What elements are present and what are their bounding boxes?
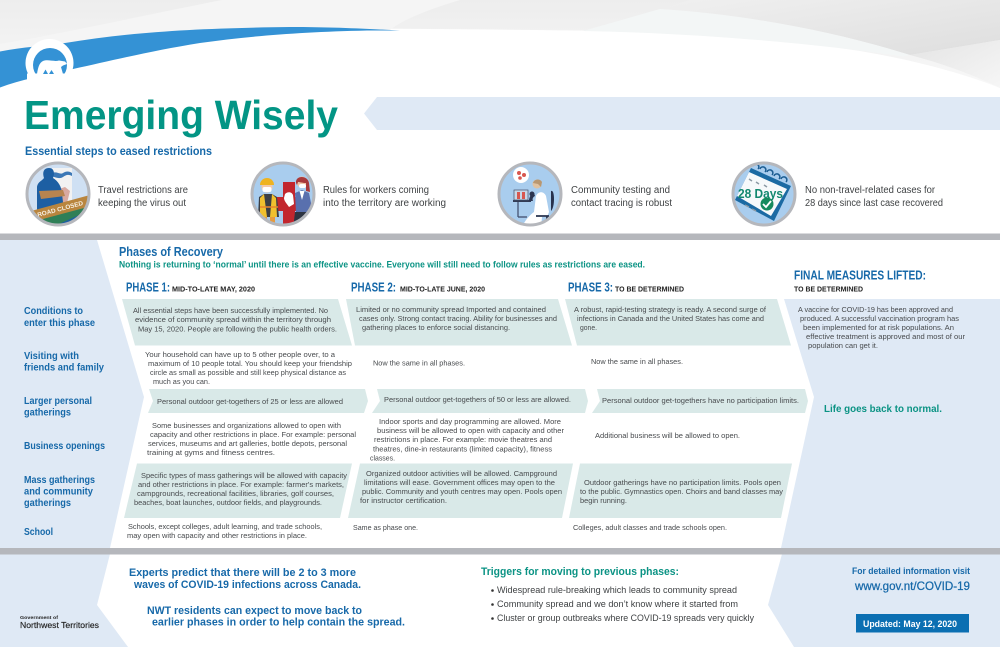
triggers list: Cluster or group outbreaks where COVID-19 spreads very quickly <box>497 613 755 623</box>
blue swoosh <box>0 27 400 88</box>
text: workers rules: into the territory are working <box>323 198 446 209</box>
teal row: larger gatherings <box>148 389 808 413</box>
phase 2 heading <box>351 280 485 294</box>
business phase 2 text: restrictions in place. For example: movie theatres and <box>374 435 552 444</box>
mass gatherings phase 2 text: for instructor certification. <box>360 496 447 505</box>
phase 2 heading: MID-TO-LATE JUNE, 2020 <box>400 284 485 294</box>
icon: 28 day calendar <box>734 164 794 224</box>
text: testing: contact tracing is robust <box>571 198 672 209</box>
final conditions text: population can get it. <box>808 341 878 350</box>
mass gatherings phase 2 text: limitations will ease. Government offices may open to the <box>364 478 555 487</box>
teal row: conditions <box>122 299 791 346</box>
final measures heading: TO BE DETERMINED <box>794 284 864 294</box>
header swoosh background <box>0 0 1000 88</box>
business phase 2 text: theatres, dine-in restaurants (limited capacity), fitness <box>373 444 552 454</box>
conditions phase 1 text: All essential steps have been successfully implemented. No <box>133 306 328 315</box>
experts prediction text: earlier phases in order to help contain the spread. <box>152 616 405 628</box>
row labels: gatherings <box>24 498 71 509</box>
subtitle: Essential steps to eased restrictions <box>25 145 212 158</box>
business phase 1 text: capacity and other restrictions in place. For example: personal <box>150 430 356 439</box>
experts prediction text <box>129 567 405 628</box>
phases heading: Phases of Recovery <box>119 244 224 259</box>
business phase 2 text: classes. <box>370 454 395 462</box>
icon: road closed: ROAD CLOSED <box>37 200 84 219</box>
phase 3 heading <box>568 280 685 294</box>
row labels: Conditions to <box>24 306 83 317</box>
web link block: www.gov.nt/COVID-19 <box>854 579 970 593</box>
visiting phase 2 text: Now the same in all phases. <box>373 358 465 368</box>
larger gatherings phase 1 text: Personal outdoor get-togethers of 25 or less are allowed <box>157 397 343 406</box>
row labels: enter this phase <box>24 318 95 329</box>
business phase 2 text: Indoor sports and day programming are allowed. More <box>379 417 561 426</box>
conditions phase 3 text: gone. <box>580 323 597 332</box>
government wordmark <box>20 615 99 630</box>
text: testing: Community testing and <box>571 185 670 196</box>
text: workers rules <box>323 185 446 209</box>
triggers list: Community spread and we don’t know where it started from <box>497 599 738 609</box>
web link block: For detailed information visit <box>852 566 970 576</box>
visiting phase 1 text <box>145 350 352 386</box>
mass gatherings phase 3 text: to the public. Gymnastics open. Choirs and band classes may <box>580 487 783 496</box>
business phase 1 text: training at gyms and fitness centres. <box>147 448 275 457</box>
school phase 1 text: Schools, except colleges, adult learning, and trade schools, <box>128 522 322 531</box>
icon ring: workers <box>252 163 314 225</box>
mass gatherings phase 3 text <box>580 478 783 505</box>
row labels: School <box>24 527 53 538</box>
visiting phase 3 text: Now the same in all phases. <box>591 357 683 366</box>
final conditions text: been implemented for at risk populations. An <box>803 323 954 332</box>
conditions phase 3 text <box>574 305 767 332</box>
triggers heading: Triggers for moving to previous phases: <box>481 566 679 578</box>
row labels: Mass gatherings <box>24 475 95 486</box>
business phase 3 text: Additional business will be allowed to open. <box>595 431 740 440</box>
business phase 1 text <box>147 421 356 457</box>
mass gatherings phase 2 text: Organized outdoor activities will be allowed. Campground <box>366 469 557 478</box>
conditions phase 3 text: A robust, rapid-testing strategy is ready. A second surge of <box>574 305 767 314</box>
school phase 1 text <box>127 522 322 540</box>
phase 1 heading <box>126 280 255 294</box>
conditions phase 2 text: cases only. Strong contact tracing. Ability for businesses and <box>359 314 557 323</box>
updated badge <box>856 614 969 632</box>
row labels: Business openings <box>24 441 105 452</box>
larger gatherings phase 3 text: Personal outdoor get-togethers have no participation limits. <box>602 396 799 405</box>
text: 28 days: 28 days since last case recovered <box>805 198 943 209</box>
mass gatherings phase 2 text: public. Community and youth centres may open. Pools open <box>362 487 562 496</box>
teal row: mass gatherings <box>124 464 792 518</box>
top divider band <box>0 234 1000 240</box>
conditions phase 1 text: evidence of community spread within the territory through <box>135 315 331 324</box>
experts prediction text: Experts predict that there will be 2 to 3 more <box>129 567 356 579</box>
final measures heading: FINAL MEASURES LIFTED: <box>794 268 926 282</box>
final conditions text: produced. A successful vaccination program has <box>800 314 959 323</box>
school phase 2 text: Same as phase one. <box>353 523 418 532</box>
final conditions text <box>798 305 965 350</box>
school phase 1 text: may open with capacity and other restrictions in place. <box>127 531 307 540</box>
mass gatherings phase 1 text: Specific types of mass gatherings will be allowed with capacity <box>141 471 347 480</box>
icon: lab testing <box>500 164 560 223</box>
experts prediction text: NWT residents can expect to move back to <box>147 605 362 617</box>
conditions phase 1 text <box>133 306 337 334</box>
phase 1 heading: MID-TO-LATE MAY, 2020 <box>172 284 255 294</box>
business phase 1 text: Some businesses and organizations allowed to open with <box>152 421 341 430</box>
left row-label panel <box>0 240 144 548</box>
visiting phase 1 text: much as you can. <box>153 377 210 386</box>
visiting phase 1 text: Your household can have up to 5 other people over, to a <box>145 350 336 359</box>
row labels: gatherings <box>24 408 71 418</box>
title: Emerging Wisely <box>24 92 338 138</box>
text: testing <box>571 185 672 209</box>
conditions phase 2 text <box>356 305 557 332</box>
government wordmark: Northwest Territories <box>20 621 99 630</box>
conditions phase 1 text: May 15, 2020. People are following the public health orders. <box>138 324 337 334</box>
mass gatherings phase 3 text: Outdoor gatherings have no participation limits. Pools open <box>584 478 781 487</box>
row labels: friends and family <box>24 362 104 374</box>
school phase 3 text: Colleges, adult classes and trade schools open. <box>573 523 727 532</box>
icon ring: travel <box>27 163 89 225</box>
icon ring: lab <box>499 163 561 225</box>
mass gatherings phase 1 text: and other restrictions in place. For example: farmer's markets, <box>138 480 344 489</box>
text: 28 days <box>805 185 943 209</box>
icon: 28 day calendar: 28 Days <box>738 186 783 201</box>
phase 3 heading: PHASE 3: <box>568 280 613 294</box>
text: 28 days: No non-travel-related cases for <box>805 185 936 196</box>
final conditions text: A vaccine for COVID-19 has been approved and <box>798 305 953 314</box>
larger gatherings phase 2 text: Personal outdoor get-togethers of 50 or less are allowed. <box>384 395 571 404</box>
text: travel restrictions: keeping the virus out <box>98 198 186 209</box>
bottom divider band <box>0 548 1000 554</box>
conditions phase 3 text: infections in Canada and the United States has come and <box>577 314 764 323</box>
final measures heading <box>794 268 926 294</box>
visiting phase 1 text: maximum of 10 people total. You should keep your friendship <box>148 359 352 368</box>
mass gatherings phase 2 text <box>360 469 562 505</box>
business phase 1 text: services, museums and art galleries, bottle depots, personal <box>148 439 347 448</box>
business phase 2 text <box>370 417 564 462</box>
final outcome: Life goes back to normal. <box>824 404 942 415</box>
text: workers rules: Rules for workers coming <box>323 185 429 196</box>
phase 3 heading: TO BE DETERMINED <box>615 284 685 294</box>
icon ring: calendar <box>733 163 795 225</box>
mass gatherings phase 1 text: campgrounds, recreational facilities, libraries, golf courses, <box>137 489 334 498</box>
header ribbon <box>364 97 1000 130</box>
conditions phase 2 text: Limited or no community spread Imported and contained <box>356 305 546 314</box>
logo: polar bear emblem <box>26 39 74 87</box>
business phase 2 text: business will be allowed to open with capacity and other <box>377 426 564 435</box>
triggers list <box>491 585 755 623</box>
visiting phase 1 text: circle as small as possible and still keep physical distance as <box>150 368 346 377</box>
conditions phase 2 text: gathering places to enforce social distancing. <box>362 323 510 332</box>
mass gatherings phase 1 text <box>134 471 347 507</box>
final measures panel <box>781 299 1000 548</box>
phases heading: Nothing is returning to ‘normal’ until there is an effective vaccine. Everyone will still need to follow rules as restrictions are eased. <box>119 260 645 270</box>
web link block <box>852 566 970 593</box>
final conditions text: effective treatment is approved and most of our <box>806 332 965 341</box>
mass gatherings phase 3 text: begin running. <box>580 496 627 505</box>
bottom left panel <box>0 554 128 647</box>
icon: workers <box>254 164 312 224</box>
mass gatherings phase 1 text: beaches, boat launches, outdoor fields, and playgrounds. <box>134 498 322 507</box>
triggers list: Widespread rule-breaking which leads to community spread <box>497 585 737 595</box>
row labels: Larger personal <box>24 396 92 407</box>
row labels <box>24 306 105 538</box>
text: travel restrictions <box>98 185 189 209</box>
icon: road closed <box>28 164 88 224</box>
experts prediction text: waves of COVID-19 infections across Canada. <box>133 579 361 591</box>
phase 1 heading: PHASE 1: <box>126 280 170 294</box>
updated badge: Updated: May 12, 2020 <box>863 619 957 629</box>
text: travel restrictions: Travel restrictions are <box>98 185 189 196</box>
bottom right panel <box>768 554 1000 647</box>
phases heading <box>119 244 645 270</box>
row labels: Visiting with <box>24 351 79 362</box>
row labels: and community <box>24 486 93 498</box>
phase 2 heading: PHASE 2: <box>351 280 396 294</box>
government wordmark: Government of <box>20 615 59 620</box>
